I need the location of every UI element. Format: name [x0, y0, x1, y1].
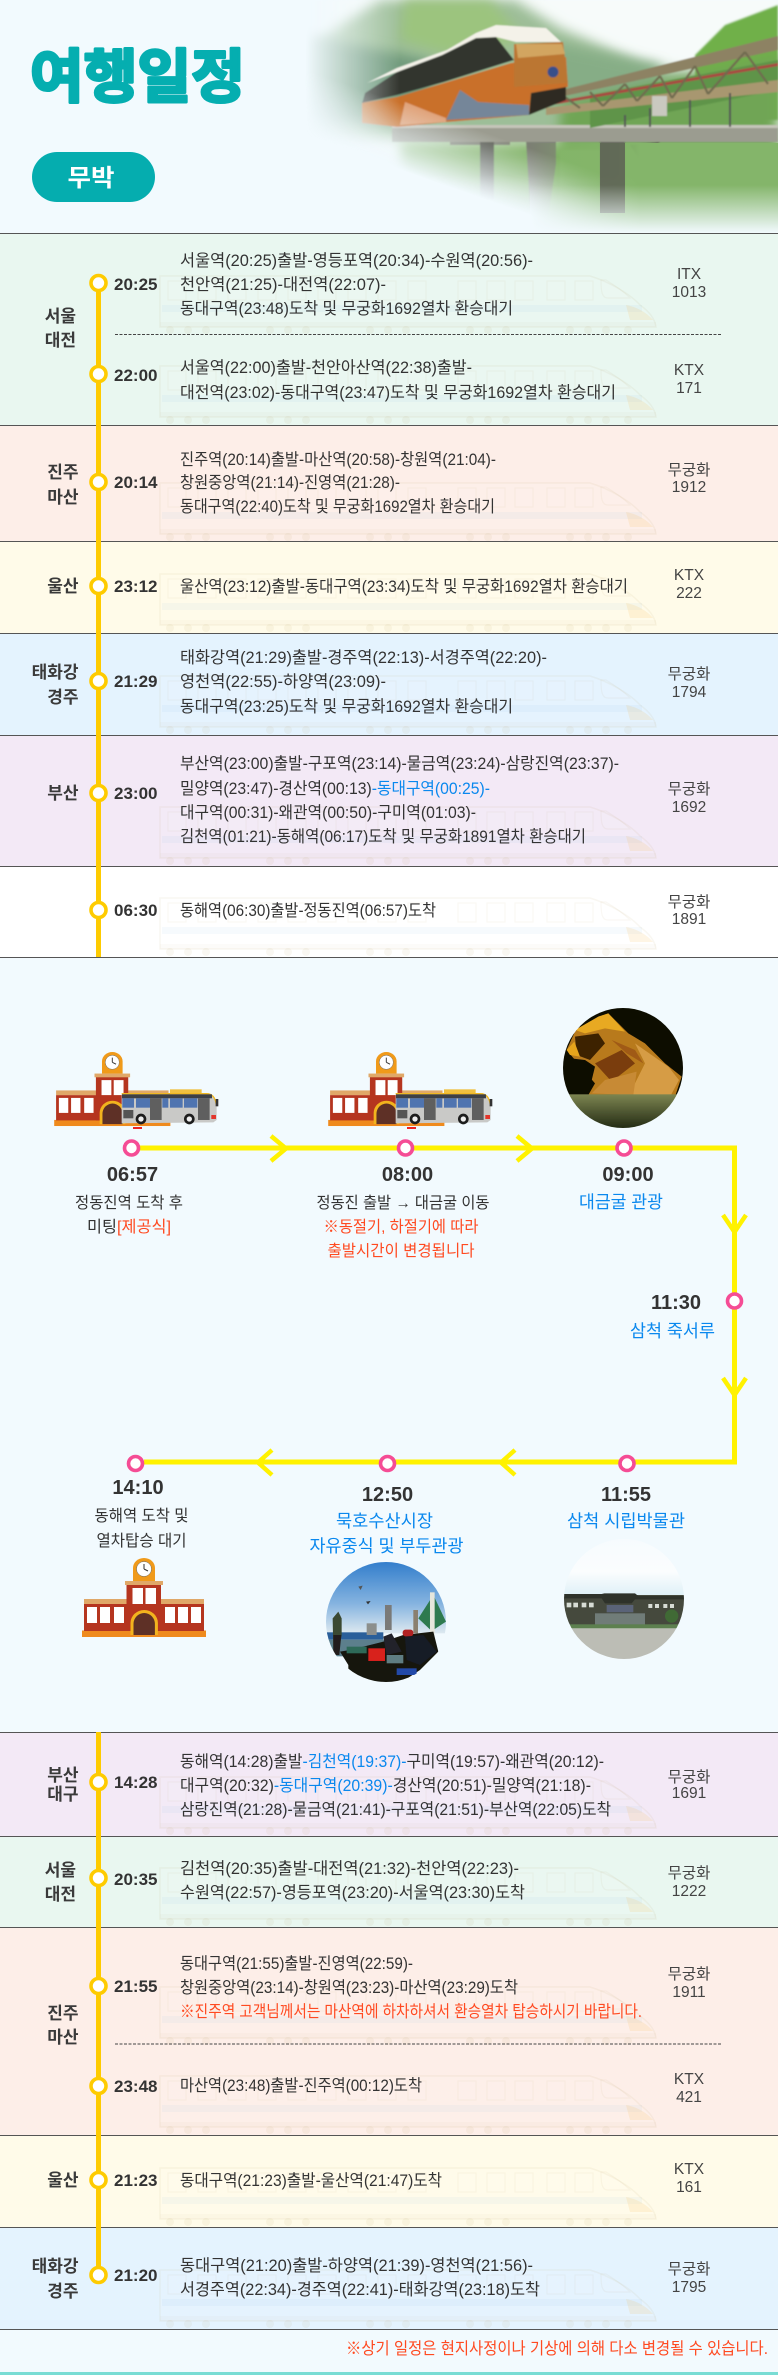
route 2 line 2: 대전역(23:02)-동대구역(23:47)도착 및 무궁화1692열차 환승대기 [180, 384, 616, 402]
notice line 2: 출발시간이 변경됩니다 [328, 1242, 475, 1260]
train type: 무궁화 [668, 2260, 710, 2278]
row: 진주 마산 [0, 425, 778, 542]
stop 14:10 [82, 1456, 206, 1637]
bottom timeline rail with stops [91, 1732, 106, 2282]
badge: 무박 [32, 152, 155, 202]
departure time: 21:29 [114, 672, 157, 691]
region label: 경주 [47, 688, 78, 707]
description: 대금굴 관광 [579, 1192, 663, 1212]
departure time: 23:12 [114, 577, 157, 596]
train type: 무궁화 [668, 1864, 710, 1882]
train type: 1891 [672, 911, 706, 928]
train type [668, 2260, 710, 2296]
description: 동해역 도착 및 [94, 1507, 188, 1525]
region label: 마산 [47, 488, 79, 507]
description: 묵호수산시장 [336, 1511, 433, 1531]
arrow right 2 [517, 1136, 532, 1161]
stop 09:00: 09:00 [602, 1164, 654, 1186]
route line 2: 수원역(22:57)-영등포역(23:20)-서울역(23:30)도착 [180, 1884, 525, 1902]
stop 11:55 [562, 1456, 685, 1662]
train type [668, 1965, 710, 2001]
train type: 1691 [672, 1785, 706, 1802]
train type: 1912 [672, 479, 706, 496]
description line 2: 자유중식 및 부두관광 [310, 1536, 464, 1556]
region label: 대전 [45, 331, 76, 350]
train type: 무궁화 [668, 780, 710, 798]
watermark train [160, 276, 656, 334]
badge: 무박: 무박 [68, 165, 114, 192]
watermark train [160, 1987, 656, 2045]
train type: 1911 [672, 1984, 706, 2001]
route: 김천역(20:35)출발-대전역(21:32)-천안역(22:23)- [180, 1860, 519, 1878]
description line 2: 미팅[제공식] [87, 1218, 171, 1236]
departure time: 06:30 [114, 901, 157, 920]
route line 3: 동대구역(22:40)도착 및 무궁화1692열차 환승대기 [180, 498, 495, 516]
day route path [140, 1136, 746, 1475]
train type [668, 780, 710, 816]
arrow left [258, 1450, 272, 1475]
bottom teal bar [0, 2372, 778, 2375]
departure time: 14:28 [114, 1773, 157, 1792]
row: 서울 대전 return [0, 1836, 778, 1927]
train type: 1794 [672, 684, 707, 701]
train type 2: 171 [676, 380, 702, 397]
route: 부산역(23:00)출발-구포역(23:14)-물금역(23:24)-삼랑진역(23:37)- [180, 755, 619, 773]
train type: 무궁화 [668, 1768, 710, 1786]
description: 정동진 출발 → 대금굴 이동 [316, 1194, 490, 1212]
stop 14:10: 14:10 [112, 1477, 164, 1499]
departure time: 20:35 [114, 1870, 157, 1889]
region label: 부산 [47, 1766, 78, 1785]
route line 3: 삼랑진역(21:28)-물금역(21:41)-구포역(21:51)-부산역(22:05)도착 [180, 1801, 611, 1819]
watermark train [160, 483, 656, 541]
departure time: 20:25 [114, 275, 157, 294]
icon: station [82, 1558, 206, 1637]
bridge piers [526, 141, 556, 198]
train type [674, 2161, 705, 2196]
row: 동해 morning [0, 866, 778, 957]
watermark train [160, 574, 656, 632]
region label: 대전 [45, 1885, 76, 1904]
row: 진주 마산 return [0, 1927, 778, 2135]
row: 울산 [0, 542, 778, 633]
route: 동해역(06:30)출발-정동진역(06:57)도착 [180, 902, 436, 920]
description: 정동진역 도착 후 [75, 1194, 183, 1212]
train type [668, 1768, 710, 1802]
route line 2: 영천역(22:55)-하양역(23:09)- [180, 673, 386, 691]
watermark train [160, 1777, 656, 1835]
route line 2: 서경주역(22:34)-경주역(22:41)-태화강역(23:18)도착 [180, 2281, 540, 2299]
notice: ※동절기, 하절기에 따라 [324, 1218, 479, 1236]
row: 울산 return [0, 2135, 778, 2227]
arrow right [271, 1136, 286, 1161]
train type [668, 665, 710, 701]
route: 동대구역(21:55)출발-진영역(22:59)- [180, 1955, 413, 1973]
train type 2: 421 [676, 2089, 702, 2106]
rails [590, 60, 778, 128]
bridge deck [392, 127, 778, 142]
region label: 마산 [47, 2028, 79, 2047]
row: 부산 대구 return [0, 1732, 778, 1836]
train type [668, 893, 710, 928]
departure time: 21:55 [114, 1977, 157, 1996]
route line 4: 김천역(01:21)-동해역(06:17)도착 및 무궁화1891열차 환승대기 [180, 828, 586, 846]
train type: 무궁화 [668, 1965, 710, 1983]
region label: 부산 [47, 784, 79, 803]
region label: 태화강 [32, 663, 78, 682]
route 2: 서울역(22:00)출발-천안아산역(22:38)출발- [180, 359, 472, 377]
region label: 울산 [47, 577, 79, 596]
watermark train [160, 807, 656, 865]
icon: station and bus [54, 1052, 218, 1129]
region label: 울산 [47, 2171, 79, 2190]
photo: cave [563, 1008, 683, 1128]
row: 부산 [0, 735, 778, 866]
train type: 1795 [672, 2279, 706, 2296]
train type: KTX [674, 2161, 705, 2178]
train type: ITX [677, 266, 702, 283]
train type [674, 567, 705, 602]
stop 09:00 [563, 1008, 683, 1210]
stop 12:50 [310, 1456, 464, 1683]
photo: fish market [323, 1560, 450, 1683]
departure time: 21:23 [114, 2171, 157, 2190]
train type: 1013 [672, 284, 706, 301]
train body [362, 57, 568, 127]
transfer notice: ※진주역 고객님께서는 마산역에 하차하셔서 환승열차 탑승하시기 바랍니다. [180, 2003, 642, 2021]
train type 2 [674, 2071, 705, 2106]
route line 3: 동대구역(23:48)도착 및 무궁화1692열차 환승대기 [180, 300, 513, 318]
region label: 태화강 [32, 2257, 78, 2276]
departure time: 21:20 [114, 2266, 157, 2285]
route: 진주역(20:14)출발-마산역(20:58)-창원역(21:04)- [180, 451, 496, 469]
stop 08:00 [316, 1052, 492, 1260]
stop 06:57: 06:57 [107, 1164, 158, 1186]
train type: KTX [674, 567, 705, 584]
route line 2: 창원중앙역(21:14)-진영역(21:28)- [180, 474, 400, 492]
stop 08:00: 08:00 [382, 1164, 433, 1186]
train type 2: KTX [674, 2071, 705, 2088]
watermark train [160, 676, 656, 734]
train type: 222 [676, 585, 702, 602]
region label: 대구 [47, 1785, 78, 1804]
second watermark train [160, 366, 656, 424]
route: 울산역(23:12)출발-동대구역(23:34)도착 및 무궁화1692열차 환승대기 [180, 578, 628, 596]
departure time 2: 22:00 [114, 366, 157, 385]
description: 삼척 죽서루 [630, 1321, 715, 1341]
train type: 1692 [672, 799, 706, 816]
route line 3: 동대구역(23:25)도착 및 무궁화1692열차 환승대기 [180, 698, 513, 716]
header foliage below the bridge [530, 143, 778, 233]
region label: 진주 [47, 463, 78, 482]
departure time 2: 23:48 [114, 2077, 157, 2096]
second watermark train [160, 2076, 656, 2134]
watermark train [160, 898, 656, 956]
route: 동대구역(21:23)출발-울산역(21:47)도착 [180, 2172, 442, 2190]
route line 2: 창원중앙역(23:14)-창원역(23:23)-마산역(23:29)도착 [180, 1979, 518, 1997]
region label: 진주 [47, 2004, 78, 2023]
route 2: 마산역(23:48)출발-진주역(00:12)도착 [180, 2077, 422, 2095]
icon: station and bus [328, 1052, 492, 1129]
train type 2: KTX [674, 362, 705, 379]
route line 3: 대구역(00:31)-왜관역(00:50)-구미역(01:03)- [180, 804, 476, 822]
route: 동대구역(21:20)출발-하양역(21:39)-영천역(21:56)- [180, 2257, 533, 2275]
title: 여행일정 [30, 45, 245, 110]
arrow left 2 [501, 1450, 515, 1475]
arrow down 2 [723, 1378, 746, 1395]
stop 11:55: 11:55 [601, 1484, 651, 1506]
arrow down [723, 1215, 746, 1232]
route line 2: 천안역(21:25)-대전역(22:07)- [180, 276, 386, 294]
route: 서울역(20:25)출발-영등포역(20:34)-수원역(20:56)- [180, 252, 533, 270]
region label: 서울 [45, 307, 76, 326]
photo: museum [564, 1566, 684, 1659]
train type: 무궁화 [668, 665, 710, 683]
region label: 서울 [45, 1861, 76, 1880]
train type 2 [674, 362, 705, 397]
watermark train [160, 2168, 656, 2226]
route: 동해역(14:28)출발-김천역(19:37)-구미역(19:57)-왜관역(20:12)- [180, 1753, 604, 1771]
train type [672, 266, 706, 301]
stop 11:30: 11:30 [651, 1292, 701, 1314]
top timeline rail with stops [91, 276, 106, 957]
stop 12:50: 12:50 [362, 1484, 413, 1506]
row: 서울 대전 outbound [0, 233, 778, 425]
row: 태화강 경주 [0, 633, 778, 735]
train type: 1222 [672, 1883, 706, 1900]
stop 11:30 [630, 1292, 742, 1341]
stop 06:57 [54, 1052, 218, 1236]
train type [668, 1864, 710, 1900]
departure time: 20:14 [114, 473, 158, 492]
departure time: 23:00 [114, 784, 157, 803]
route line 2: 밀양역(23:47)-경산역(00:13)-동대구역(00:25)- [180, 780, 490, 798]
route line 2: 대구역(20:32)-동대구역(20:39)-경산역(20:51)-밀양역(21:18)- [180, 1777, 591, 1795]
description line 2: 열차탑승 대기 [96, 1532, 186, 1550]
region label: 경주 [47, 2282, 78, 2301]
route: 태화강역(21:29)출발-경주역(22:13)-서경주역(22:20)- [180, 649, 547, 667]
header photo: monorail train on bridge [310, 0, 778, 208]
watermark train [160, 1868, 656, 1926]
train type: 무궁화 [668, 461, 710, 479]
watermark train [160, 2270, 656, 2328]
train type [668, 461, 710, 496]
row: 태화강 경주 return [0, 2227, 778, 2329]
description: 삼척 시립박물관 [567, 1511, 685, 1531]
train type: 무궁화 [668, 893, 710, 911]
train type: 161 [676, 2179, 702, 2196]
